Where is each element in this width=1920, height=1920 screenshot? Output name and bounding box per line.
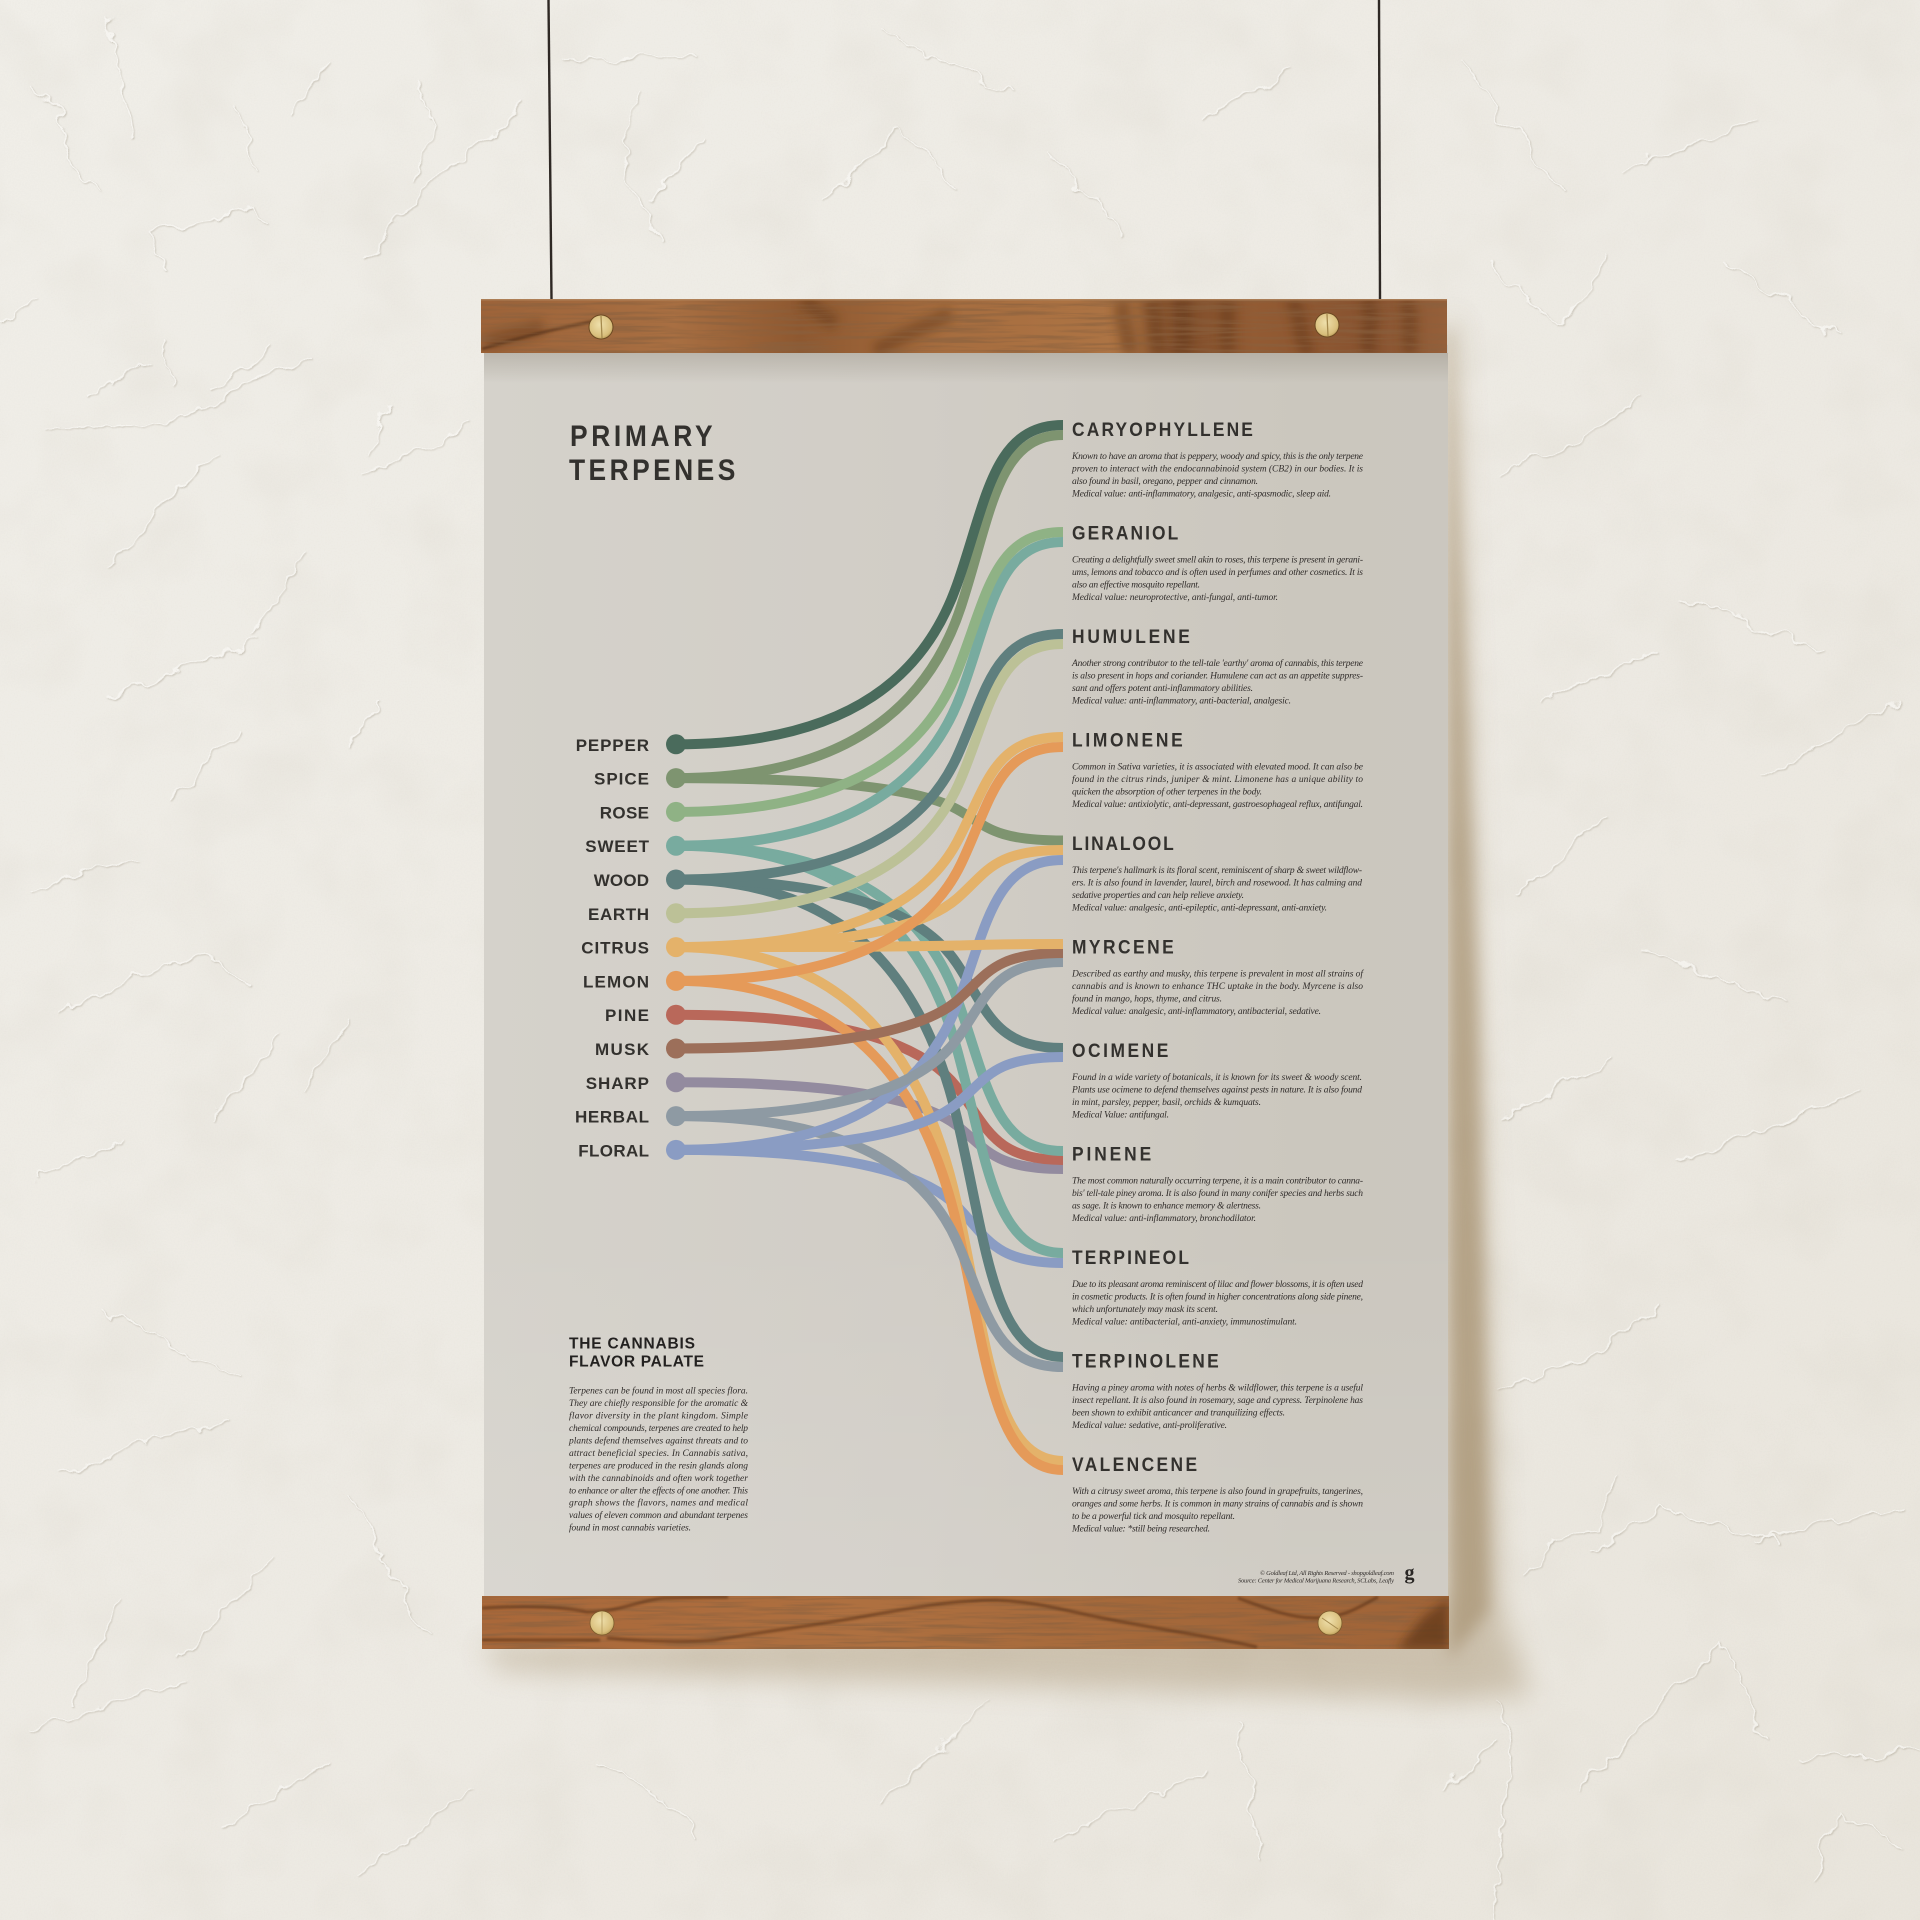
terpene: terpinolene: been shown to exhibit anticancer and tranquilizing effects. [1072,1407,1285,1418]
text block: the cannabis flavor palate: graph shows the flavors, names and medical [569,1498,748,1509]
flavor: citrus [581,937,686,958]
text block: the cannabis flavor palate: FLAVOR PALATE [569,1354,704,1370]
flavor: sharp: SHARP [586,1074,649,1093]
hanging cord left [548,0,552,299]
flavor: pepper [576,734,686,755]
terpene: pinene: PINENE [1072,1142,1151,1165]
terpene: myrcene: Medical value: analgesic, anti-inflammatory, antibacterial, sedative. [1071,1006,1321,1017]
text block: the cannabis flavor palate: to enhance or alter the effects of one another. This [569,1485,748,1496]
terpene: terpineol: Due to its pleasant aroma reminiscent of lilac and flower blossoms, it is often used [1071,1279,1363,1290]
bottom wooden hanger bar [482,1596,1449,1649]
flavor: sweet: SWEET [585,837,650,856]
terpene: valencene: VALENCENE [1072,1453,1197,1475]
flavor: wood: WOOD [594,871,649,890]
terpene: humulene: HUMULENE [1072,625,1190,647]
flavor: rose: ROSE [600,803,649,822]
flavor: lemon [583,971,686,991]
terpene: myrcene: Described as earthy and musky, this terpene is prevalent in most all strains of [1071,968,1364,980]
flavor: rose [600,802,686,822]
terpene: linalool: sedative properties and can help relieve anxiety. [1072,891,1244,901]
flavor: floral [578,1140,686,1160]
terpene: terpinolene: TERPINOLENE [1072,1349,1219,1372]
terpene: valencene: to be a powerful tick and mosquito repellant. [1072,1511,1235,1522]
terpene: valencene: Medical value: *still being researched. [1071,1524,1210,1534]
flavor: spice: SPICE [594,770,649,789]
terpene: geraniol [1071,521,1363,603]
terpene: pinene [1071,1142,1363,1224]
flavor: citrus: CITRUS [581,939,649,958]
terpene: linalool: LINALOOL [1072,832,1174,854]
text block: the cannabis flavor palate: values of eleven common and abundant terpenes [569,1510,748,1521]
logo: g mark: g [1404,1562,1414,1584]
title [569,418,735,486]
terpene: linalool: ers. It is also found in lavender, laurel, birch and rosewood. It has calming and [1072,878,1362,888]
terpene: caryophyllene: Medical value: anti-inflammatory, analgesic, anti-spasmodic, sleep aid. [1071,488,1331,499]
terpene: terpineol [1071,1246,1363,1327]
screw: bottom left [590,1611,614,1635]
footer credits [1238,1570,1394,1584]
terpene: terpinolene: insect repellant. It is also found in rosemary, sage and cypress. Terpinolene has [1072,1395,1363,1406]
terpene: terpineol: TERPINEOL [1072,1246,1189,1268]
flavor: herbal: HERBAL [575,1108,649,1127]
text block: the cannabis flavor palate: They are chiefly responsible for the aromatic & [569,1398,749,1409]
text block: the cannabis flavor palate: attract beneficial species. In Cannabis sativa, [569,1448,748,1459]
flavor: spice [594,768,686,789]
terpene: geraniol: ums, lemons and tobacco and is often used in perfumes and other cosmetics. It is [1072,567,1363,578]
terpene: myrcene: MYRCENE [1072,935,1174,958]
screw: bottom right [1318,1611,1342,1635]
footer credits: © Goldleaf Ltd, All Rights Reserved - shopgoldleaf.com [1260,1570,1394,1577]
flavor: earth: EARTH [588,905,649,924]
terpene: valencene: With a citrusy sweet aroma, this terpene is also found in grapefruits, tangerines, [1072,1486,1363,1497]
text block: the cannabis flavor palate: flavor diversity in the plant kingdom. Simple [569,1410,748,1421]
flavor: floral: FLORAL [578,1141,649,1160]
flow chart: flavors to terpenes [676,425,1063,1470]
flavor: herbal [575,1106,686,1127]
screw: top left [589,315,613,339]
terpene: pinene: bis' tell-tale piney aroma. It is also found in many conifer species and herbs such [1072,1188,1363,1199]
text block: the cannabis flavor palate: terpenes are produced in the resin glands along [569,1461,748,1471]
flavor: pine [605,1005,686,1025]
terpene: caryophyllene: CARYOPHYLLENE [1072,418,1253,440]
terpene: humulene: is also present in hops and coriander. Humulene can act as an appetite suppres- [1072,672,1363,682]
terpene: terpineol: Medical value: antibacterial, anti-anxiety, immunostimulant. [1071,1317,1297,1327]
terpene: myrcene: cannabis and is known to enhance THC uptake in the body. Myrcene is also [1072,982,1363,992]
terpene: limonene: Common in Sativa varieties, it is associated with elevated mood. It can also be [1072,762,1363,772]
terpene: ocimene: in mint, parsley, pepper, basil, orchids & kumquats. [1072,1098,1261,1108]
text block: the cannabis flavor palate: with the cannabinoids and often work together [569,1473,748,1484]
flavor: sweet [585,836,686,856]
terpene: geraniol: Creating a delightfully sweet smell akin to roses, this terpene is present in gerani- [1072,554,1363,566]
terpene: valencene [1071,1453,1363,1534]
terpene: ocimene: OCIMENE [1072,1039,1168,1061]
shadow cast on the wall [482,320,1530,1700]
terpene: terpineol: which unfortunately may mask its scent. [1072,1304,1218,1315]
terpene: ocimene: Plants use ocimene to defend themselves against pests in nature. It is also found [1071,1084,1362,1096]
terpene: ocimene [1071,1039,1362,1120]
hanging cord right [1379,0,1380,299]
text block: the cannabis flavor palate: plants defend themselves against threats and to [568,1435,748,1446]
flavor labels and dots [575,734,686,1160]
terpene: pinene: as sage. It is known to enhance memory & alertness. [1072,1201,1261,1211]
text block: the cannabis flavor palate [568,1336,749,1534]
terpene: pinene: The most common naturally occurring terpene, it is a main contributor to canna- [1072,1176,1363,1186]
title: TERPENES [569,452,735,486]
text block: the cannabis flavor palate: Terpenes can be found in most all species flora. [569,1386,748,1396]
terpene: geraniol: also an effective mosquito repellant. [1072,579,1200,590]
terpene: pinene: Medical value: anti-inflammatory, bronchodilator. [1071,1213,1256,1224]
flavor: lemon: LEMON [583,972,649,991]
terpene: terpineol: in cosmetic products. It is often found in higher concentrations along side pinene, [1072,1292,1363,1302]
terpene: valencene: oranges and some herbs. It is common in many strains of cannabis and is shown [1072,1498,1363,1510]
poster paper [484,345,1448,1605]
text block: the cannabis flavor palate: chemical compounds, terpenes are created to help [569,1424,748,1434]
flavor: pepper: PEPPER [576,736,649,755]
terpene: geraniol: GERANIOL [1072,521,1178,544]
terpene: linalool: Medical value: analgesic, anti-epileptic, anti-depressant, anti-anxiety. [1071,903,1327,913]
terpene: myrcene [1071,935,1364,1017]
terpene: linalool [1071,832,1362,913]
text block: the cannabis flavor palate: found in most cannabis varieties. [569,1523,691,1534]
terpene: limonene: Medical value: antixiolytic, anti-depressant, gastroesophageal reflux, antifungal. [1071,799,1363,810]
terpene: linalool: This terpene's hallmark is its floral scent, reminiscent of sharp & sweet wildflow- [1072,865,1362,876]
terpene: humulene: Another strong contributor to the tell-tale 'earthy' aroma of cannabis, this terpene [1071,658,1363,669]
flavor: musk [595,1038,686,1059]
terpene: humulene [1071,625,1363,706]
title: PRIMARY [570,418,713,452]
terpene: ocimene: Found in a wide variety of botanicals, it is known for its sweet & woody scent. [1071,1072,1362,1083]
terpene: terpinolene [1071,1349,1363,1431]
terpene: ocimene: Medical Value: antifungal. [1071,1109,1169,1120]
flavor: wood [594,870,686,890]
terpene: caryophyllene: Known to have an aroma that is peppery, woody and spicy, this is the only terpene [1071,452,1363,462]
terpene: terpinolene: Having a piney aroma with notes of herbs & wildflower, this terpene is a useful [1071,1382,1363,1394]
terpene: limonene [1071,728,1363,810]
terpene: limonene: found in the citrus rinds, juniper & mint. Limonene has a unique ability to [1072,774,1363,785]
text block: the cannabis flavor palate: THE CANNABIS [569,1336,695,1352]
terpene: limonene: LIMONENE [1072,728,1183,751]
terpene: caryophyllene [1071,418,1363,499]
terpene: myrcene: found in mango, hops, thyme, and citrus. [1072,993,1222,1004]
terpene: limonene: quicken the absorption of other terpenes in the body. [1072,786,1262,797]
flavor: pine: PINE [605,1006,649,1025]
terpene: geraniol: Medical value: neuroprotective, anti-fungal, anti-tumor. [1071,592,1278,603]
terpene: caryophyllene: proven to interact with the endocannabinoid system (CB2) in our bodies. It is [1071,464,1363,474]
terpene: terpinolene: Medical value: sedative, anti-proliferative. [1071,1420,1227,1431]
flavor: earth [588,903,686,924]
flavor: sharp [586,1072,686,1093]
top wooden hanger bar [481,299,1447,353]
terpene: humulene: sant and offers potent anti-inflammatory abilities. [1072,683,1253,694]
screw: top right [1315,313,1339,337]
terpene: caryophyllene: also found in basil, oregano, pepper and cinnamon. [1072,476,1258,487]
terpene: humulene: Medical value: anti-inflammatory, anti-bacterial, analgesic. [1071,695,1291,706]
footer credits: Source: Center for Medical Marijuana Research, SCLabs, Leafly [1238,1578,1394,1584]
flavor: musk: MUSK [595,1040,650,1059]
